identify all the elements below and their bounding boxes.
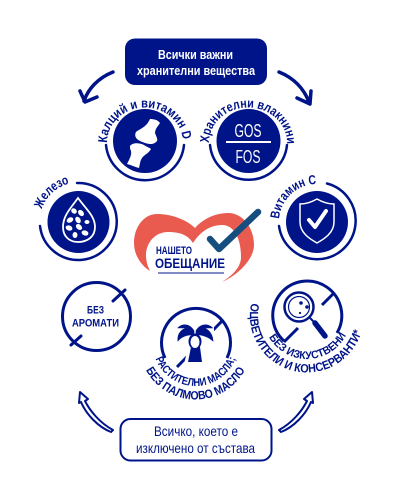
badge: no artificial colours and preservatives: БЕЗ ИЗКУСТВЕНИ (269, 332, 346, 360)
bottom box: everything excluded from the composition: Всичко, което е (154, 423, 238, 439)
arrow: bottom left outline (79, 392, 113, 432)
central logo: our promise heart (134, 212, 258, 282)
badge: no palm oil: БЕЗ ПАЛМОВО МАСЛО (146, 366, 244, 400)
arrow: top left (80, 72, 113, 102)
checkmark (210, 212, 258, 249)
icon: calcium and vitamin D: Калций и витамин D (98, 100, 191, 142)
badge: no flavourings (62, 282, 130, 350)
icon: vitamin C: Витамин С (270, 175, 316, 218)
icon: iron: Железо (34, 178, 68, 210)
arrow: top right (279, 72, 311, 104)
heading box: all essential nutrients: хранителни вещества (137, 63, 256, 78)
badge: no artificial colours and preservatives: ОЦВЕТИТЕЛИ И КОНСЕРВАНТИ* (247, 304, 360, 372)
icon: iron (34, 178, 118, 262)
icon: dietary fibre GOS FOS (200, 100, 294, 181)
promise label: НАШЕТО (156, 245, 192, 257)
promise label: ОБЕЩАНИЕ (155, 255, 225, 271)
bottom box: everything excluded from the composition: изключено от състава (136, 440, 255, 456)
badge: no palm oil: РАСТИТЕЛНИ МАСЛА; (156, 356, 237, 386)
promise label (155, 245, 225, 274)
badge: no flavourings: АРОМАТИ (72, 318, 119, 330)
icon: palm tree (176, 322, 214, 364)
icon: dietary fibre GOS FOS: FOS (236, 147, 260, 167)
icon: magnifier (284, 292, 325, 336)
icon: dietary fibre GOS FOS: GOS (234, 121, 262, 141)
icon: vitamin C (270, 175, 357, 260)
heading box: all essential nutrients (125, 38, 267, 85)
arrow: bottom right outline (279, 392, 313, 432)
heart (134, 213, 254, 282)
bottom box: everything excluded from the composition (120, 419, 272, 460)
icon: dietary fibre GOS FOS: Хранителни влакнини (200, 100, 294, 144)
icon: calcium and vitamin D (98, 100, 191, 182)
heading box: all essential nutrients: Всички важни (158, 47, 233, 62)
badge: no flavourings: БЕЗ (87, 304, 104, 316)
badge: no palm oil (146, 306, 244, 400)
